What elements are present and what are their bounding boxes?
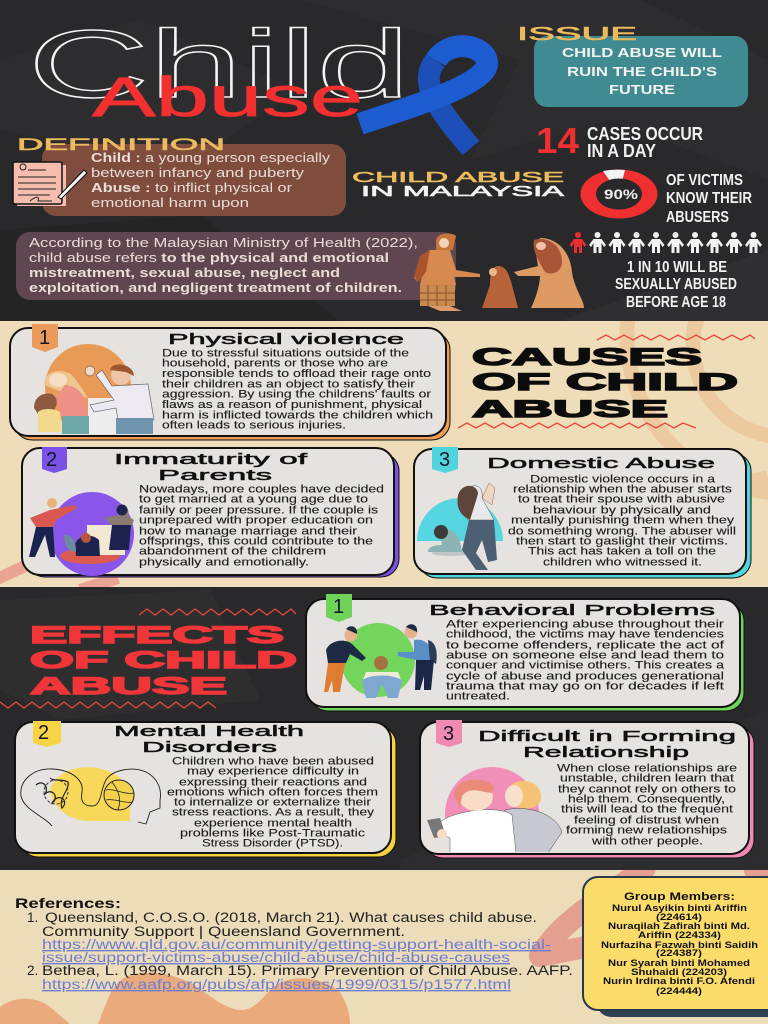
chart: 90 percent donut: 90%	[604, 186, 639, 202]
heading: immaturity of parents	[114, 451, 309, 484]
panel: causes 2 immaturity of parents	[22, 447, 399, 577]
stat: of victims know their abusers: OF VICTIMS	[666, 172, 743, 189]
text: relationship body: they cannot rely on others to	[558, 784, 736, 796]
text: mental health body: may experience difficulty in	[187, 766, 359, 778]
background: beige causes section	[0, 321, 768, 587]
heading: difficult in forming relationship: Difficult in Forming	[478, 728, 736, 745]
text: behavioral problems body: childhood, the victims may have tendencies	[446, 628, 725, 640]
illustration: arguing parents and child	[29, 492, 134, 576]
text: ministry definition lines: mistreatment, sexual abuse, neglect and	[29, 266, 340, 280]
badge: number 1	[32, 324, 58, 352]
illustration: distrustful couple	[427, 767, 562, 861]
heading: effects of child abuse: EFFECTS	[30, 622, 284, 649]
text: physical violence body	[162, 348, 433, 432]
stat: 1 in 10 sexually abused: SEXUALLY ABUSED	[615, 276, 737, 293]
heading: difficult in forming relationship	[478, 728, 736, 761]
heading: behavioral problems: Behavioral Problems	[429, 602, 715, 619]
text: mental health body: emotions which often forces them	[167, 786, 378, 798]
text: immaturity body: how to manage marriage and their	[139, 526, 357, 538]
text: definition lines: between infancy and puberty	[91, 166, 305, 180]
text: mental health body: Stress Disorder (PTSD).	[202, 838, 343, 850]
title: Abuse: Abuse	[92, 65, 363, 128]
text block: references: 1.	[27, 910, 38, 925]
text: relationship body: with other people.	[591, 836, 703, 848]
text: immaturity body: offsprings, this could contribute to the	[139, 536, 373, 548]
heading: immaturity of parents: Immaturity of	[114, 451, 309, 468]
badge: number 3	[432, 447, 458, 473]
text: immaturity body: Nowadays, more couples have decided	[139, 484, 384, 496]
stat: 1 in 10 sexually abused: 1 IN 10 WILL BE	[627, 259, 727, 276]
heading: child abuse in malaysia: CHILD ABUSE	[352, 169, 564, 186]
text: behavioral problems body: to become offenders, replicate the act of	[446, 640, 725, 652]
text: definition lines	[91, 151, 331, 210]
background: beige references section	[0, 860, 768, 1024]
text: behavioral problems body: trauma that may go on for decades if left	[446, 680, 724, 692]
text: relationship body: When close relationships are	[557, 762, 737, 774]
text: domestic abuse body: Domestic violence occurs in a	[530, 474, 716, 486]
text: behavioral problems body	[446, 618, 725, 702]
text: domestic abuse body: behaviour by physically and	[533, 504, 711, 516]
heading: mental health disorders	[114, 723, 304, 756]
panel: group members: Nuraqilah Zafirah binti Md.	[608, 921, 750, 931]
stat: 14 cases occur in a day: IN A DAY	[587, 141, 656, 161]
text: relationship body: this will lead to the frequent	[561, 804, 733, 816]
text: immaturity body: unprepared with proper education on	[139, 514, 373, 526]
panel: effects 3 difficult in forming relationship	[420, 720, 754, 861]
title: Child: Child	[28, 11, 410, 118]
text block: references	[15, 895, 573, 992]
text: ministry definition lines: child abuse refers to the physical and emotional	[29, 251, 389, 265]
heading: mental health disorders: Disorders	[142, 739, 277, 756]
stat: of victims know their abusers: ABUSERS	[666, 209, 729, 226]
text: definition lines: emotional harm upon	[91, 196, 249, 210]
panel: group members: (224444)	[656, 986, 702, 996]
text: mental health body: stress reactions. As a result, they	[172, 806, 375, 818]
text: behavioral problems body: untreated.	[446, 690, 510, 702]
text: definition lines: Child : a young person especially	[91, 151, 331, 165]
panel: effects 1 behavioral problems	[306, 594, 744, 711]
heading: causes of child abuse: OF CHILD	[472, 369, 738, 396]
text block: references: References:	[15, 895, 121, 911]
text: physical violence body: their children as an object to satisfy their	[162, 378, 415, 390]
panel: issue statement: FUTURE	[609, 82, 675, 97]
text: relationship body	[557, 762, 737, 848]
heading: effects of child abuse: OF CHILD	[30, 647, 297, 674]
panel: group members: Shuhaidi (224203)	[631, 967, 727, 977]
text: relationship body: forming new relationships	[566, 824, 728, 836]
panel: group members: Group Members:	[624, 891, 735, 903]
text: definition lines: Abuse : to inflict physical or	[91, 181, 292, 195]
heading: definition: DEFINITION	[17, 135, 225, 154]
badge: number 3: 3	[443, 723, 454, 745]
text block: references: Queensland, C.O.S.O. (2018, March 21). What causes child abuse.	[45, 910, 537, 925]
text: domestic abuse body	[508, 474, 736, 568]
text: immaturity body: family or peer pressure. If the couple is	[139, 504, 379, 516]
text: domestic abuse body: then start to gaslight their victims.	[516, 536, 728, 548]
panel: definition	[13, 135, 346, 216]
background: dark effects section	[0, 587, 768, 870]
stat: 14 cases occur in a day: CASES OCCUR	[587, 124, 703, 144]
text: domestic abuse body: children who witnessed it.	[543, 556, 702, 568]
heading: causes of child abuse: CAUSES	[472, 344, 702, 371]
panel: group members: Nur Syarah binti Mohamed	[608, 958, 750, 968]
heading: effects of child abuse	[0, 609, 297, 708]
panel: causes 3 domestic abuse	[414, 447, 751, 578]
heading: causes of child abuse: ABUSE	[472, 396, 668, 423]
text: mental health body	[167, 756, 378, 850]
illustration: scolding mothers and child	[414, 233, 584, 311]
text: mental health body: expressing their reactions and	[179, 776, 367, 788]
text block: references: Community Support | Queensland Government.	[42, 924, 405, 939]
text: ministry definition lines	[29, 236, 418, 295]
badge: number 1: 1	[333, 596, 344, 618]
text: physical violence body: flaws as a reason of punishment, physical	[162, 399, 422, 411]
heading: mental health disorders: Mental Health	[114, 723, 304, 740]
text: mental health body: experience mental health	[194, 818, 352, 830]
heading: domestic abuse: Domestic Abuse	[487, 455, 715, 472]
panel: group members	[583, 877, 768, 1017]
panel: issue statement: CHILD ABUSE WILL	[562, 45, 722, 60]
text: immaturity body	[139, 484, 384, 568]
icon: blue awareness ribbon	[360, 46, 487, 148]
badge: number 2: 2	[46, 449, 57, 471]
icon: signed document	[13, 162, 87, 206]
heading: physical violence: Physical violence	[168, 331, 404, 348]
stat: 14 cases occur in a day: 14	[536, 120, 579, 161]
text: physical violence body: aggression. By using the childrens' faults or	[162, 388, 431, 400]
background: dark top section	[0, 0, 768, 321]
text: behavioral problems body: abuse on someone else and lead them to	[446, 650, 724, 662]
text: relationship body: unstable, children learn that	[560, 772, 734, 784]
badge: number 2	[33, 721, 61, 747]
text: behavioral problems body: cycle of abuse and produces generational	[446, 670, 724, 682]
stat: of victims know their abusers: KNOW THEIR	[666, 190, 752, 207]
panel: group members: Nurfaziha Fazwah binti Saidih	[601, 940, 758, 950]
text: physical violence body: Due to stressful situations outside of the	[162, 348, 409, 360]
icon: ten people pictogram	[570, 232, 762, 253]
text: immaturity body: to get married at a young age due to	[139, 494, 368, 506]
text: ministry definition lines: According to the Malaysian Ministry of Health (2022),	[29, 236, 418, 250]
stat: 1 in 10 sexually abused: BEFORE AGE 18	[626, 294, 726, 311]
text block: references: issue/support-victims-abuse/child-abuse/child-abuse-causes	[42, 950, 510, 965]
stat: of victims know their abusers	[666, 172, 752, 226]
text: mental health body: Children who have been abused	[172, 756, 374, 768]
text: immaturity body: abandonment of the childrem	[139, 546, 326, 558]
heading: effects of child abuse: ABUSE	[30, 673, 227, 700]
text: ministry definition lines: exploitation, and negligent treatment of children.	[29, 281, 402, 295]
text: relationship body: feeling of distrust when	[574, 814, 719, 826]
text: behavioral problems body: After experiencing abuse throughout their	[446, 618, 724, 630]
chart: 90 percent donut	[580, 170, 658, 218]
panel: group members: Nurul Asyikin binti Ariffin	[612, 903, 747, 913]
illustration: domestic abuse	[417, 483, 503, 570]
illustration: tangled and organised mind	[21, 767, 160, 826]
panel: group members: Nurin Irdina binti F.O. Afendi	[603, 976, 755, 986]
badge: number 2	[42, 447, 67, 473]
heading: difficult in forming relationship: Relationship	[523, 744, 689, 761]
text block: references: https://www.qld.gov.au/community/getting-support-health-social-	[42, 937, 551, 952]
text block: references: Bethea, L. (1999, March 15). Primary Prevention of Child Abuse. AAFP.	[42, 963, 573, 978]
text block: references: https://www.aafp.org/pubs/afp/issues/1999/0315/p1577.html	[42, 977, 511, 992]
illustration: bullying	[324, 623, 437, 698]
text: physical violence body: often leads to serious injuries.	[162, 420, 346, 432]
text: relationship body: help them. Consequently,	[568, 794, 725, 806]
panel: issue statement: RUIN THE CHILD'S	[567, 64, 717, 79]
text: physical violence body: responsible tends to offload their rage onto	[162, 368, 431, 380]
panel: group members: Ariffin (224334)	[638, 930, 721, 940]
panel: effects 2 mental health disorders	[15, 721, 396, 857]
badge: number 3	[436, 720, 462, 747]
text: physical violence body: household, parents or those who are	[162, 358, 388, 370]
badge: number 1: 1	[39, 327, 50, 349]
text: mental health body: problems like Post-Traumatic	[180, 828, 366, 840]
text: domestic abuse body: relationship when the abuser starts	[513, 484, 733, 496]
badge: number 3: 3	[439, 449, 450, 471]
panel: group members: (224614)	[656, 912, 702, 922]
text: domestic abuse body: mentally punishing them when they	[511, 514, 735, 526]
badge: number 2: 2	[38, 722, 49, 744]
heading: causes of child abuse	[458, 335, 755, 428]
stat: 14 cases occur in a day	[536, 120, 703, 161]
heading: issue: ISSUE	[517, 24, 637, 44]
text block: references: 2.	[27, 963, 38, 978]
stat: 1 in 10 sexually abused	[615, 259, 737, 311]
heading: immaturity of parents: Parents	[158, 467, 272, 484]
text: physical violence body: harm is inflicted towards the children which	[162, 410, 433, 422]
heading: child abuse in malaysia	[352, 169, 564, 200]
text: mental health body: to internalize or externalize their	[174, 796, 371, 808]
text: domestic abuse body: This act has taken a toll on the	[528, 546, 716, 558]
text: immaturity body: physically and emotionally.	[139, 556, 309, 568]
panel: issue statement	[534, 36, 748, 107]
heading: child abuse in malaysia: IN MALAYSIA	[361, 183, 564, 200]
panel: ministry of health definition	[16, 232, 456, 300]
text: domestic abuse body: to treat their spouse with abusive	[518, 494, 725, 506]
panel: group members: (224387)	[656, 948, 702, 958]
illustration: family conflict	[34, 344, 154, 436]
text: domestic abuse body: do something wrong. The abuser will	[508, 526, 736, 538]
text: behavioral problems body: conquer and victimise others. This creates a	[446, 660, 725, 672]
panel: causes 1 physical violence	[10, 324, 450, 440]
badge: number 1	[326, 594, 352, 622]
